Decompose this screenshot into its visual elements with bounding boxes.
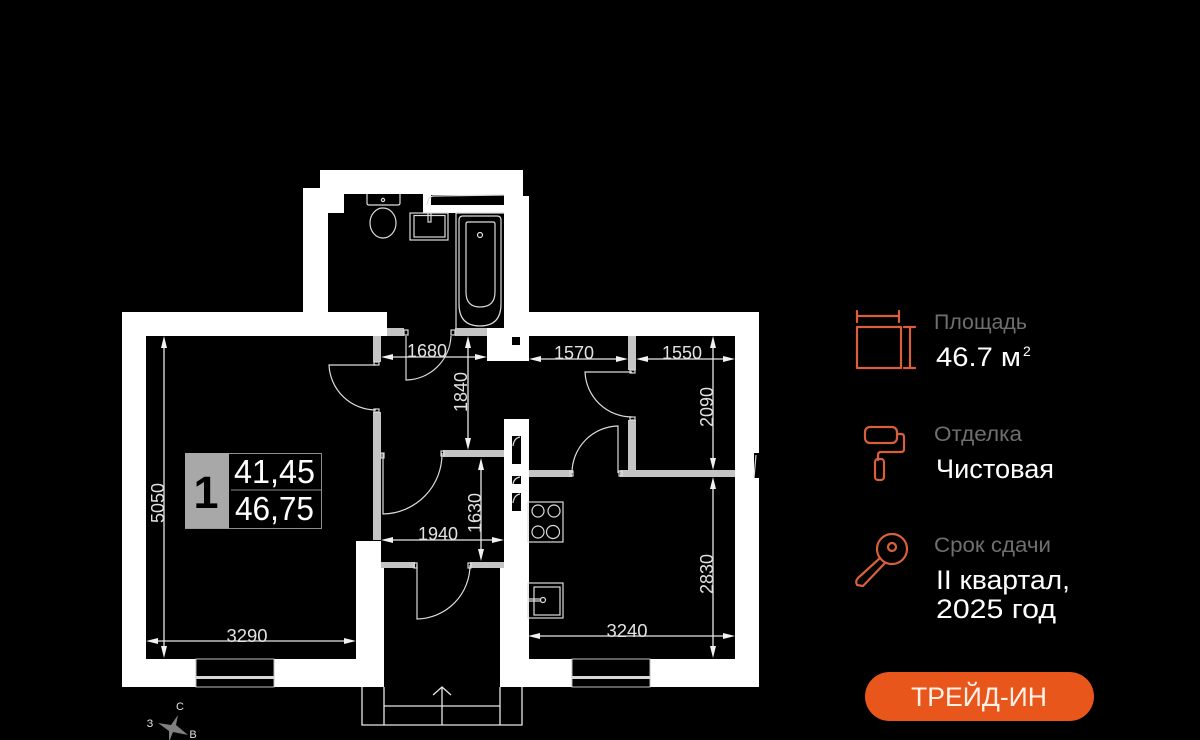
text: finish — [934, 423, 1054, 484]
dimension: 1680: 1680 — [407, 341, 447, 361]
button: trade-in — [865, 672, 1094, 721]
dimension: 1840 — [451, 336, 471, 450]
interior partitions — [373, 328, 735, 568]
balcony — [362, 687, 522, 725]
unit badge: 41,45 — [234, 453, 315, 490]
text: delivery date: Срок сдачи — [934, 534, 1051, 557]
compass: З — [147, 718, 154, 730]
dimension: 1630 — [465, 458, 485, 561]
dimension: 3290 — [146, 626, 356, 646]
floor plan — [122, 170, 759, 725]
unit badge: 1 — [193, 467, 219, 518]
dimension: 5050 — [148, 336, 168, 658]
text: finish: Чистовая — [936, 454, 1054, 484]
exterior walls — [122, 170, 759, 687]
windows — [196, 659, 650, 687]
dimension: 1550: 1550 — [662, 343, 702, 363]
dimension: 2830: 2830 — [697, 554, 717, 594]
text: finish: Отделка — [934, 423, 1022, 446]
dimension: 2090 — [697, 336, 717, 470]
dimension: 5050: 5050 — [148, 483, 168, 523]
icon: area — [857, 311, 915, 368]
icon: bathroom sink — [410, 213, 448, 240]
button: trade-in: ТРЕЙД-ИН — [911, 681, 1047, 712]
text: delivery date: 2025 год — [936, 594, 1056, 624]
dimension: 1570 — [529, 343, 628, 363]
dimension: 1840: 1840 — [451, 372, 471, 412]
icon: kitchen sink — [528, 583, 563, 618]
ventilation shafts — [427, 195, 759, 511]
unit badge — [185, 453, 322, 528]
text: area: 46.7 м — [936, 342, 1021, 372]
dimension: 2830 — [697, 477, 717, 658]
dimension: 3240 — [528, 621, 735, 641]
icon: stove — [528, 502, 563, 542]
doors — [329, 330, 635, 619]
text: area: Площадь — [934, 311, 1027, 334]
dimension: 3290: 3290 — [226, 626, 268, 646]
icon: key — [856, 534, 907, 586]
dimension: 1550 — [636, 343, 735, 363]
dimension: 3240: 3240 — [606, 621, 648, 641]
compass — [147, 701, 197, 740]
dimension: 1630: 1630 — [465, 493, 485, 533]
dimension: 1940 — [381, 524, 504, 544]
icon: toilet — [367, 194, 400, 238]
dimension: 1680 — [381, 341, 487, 361]
icon: bathtub — [456, 213, 504, 328]
text: delivery date: II квартал, — [936, 565, 1070, 595]
dimension: 2090: 2090 — [697, 387, 717, 427]
icon: paint roller — [865, 427, 904, 480]
text: delivery date — [934, 534, 1070, 624]
compass: С — [176, 701, 184, 713]
text: area: 2 — [1023, 343, 1031, 359]
dimension: 1570: 1570 — [554, 343, 594, 363]
dimension: 1940: 1940 — [418, 524, 458, 544]
text: area — [934, 311, 1031, 372]
unit badge: 46,75 — [235, 490, 314, 527]
